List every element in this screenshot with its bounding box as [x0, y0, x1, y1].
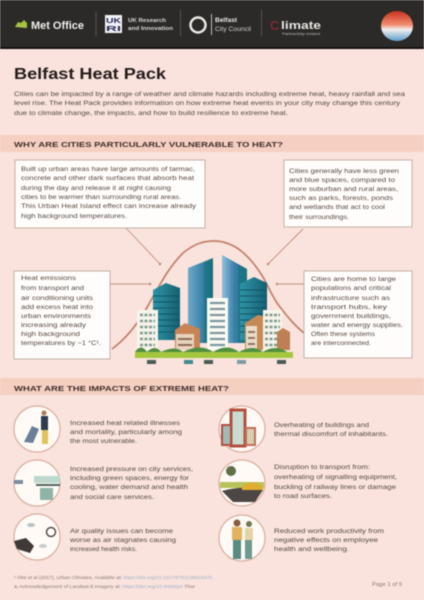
callout: urban heat island [15, 160, 205, 228]
impact: air quality: increased health risks. [70, 546, 137, 553]
logo: UK Research and Innovation: UK [106, 16, 122, 25]
callout: urban heat island: cities to be warmer than surrounding rural areas. [21, 194, 181, 201]
callout: urban heat island: during the day and release it at night causing [21, 185, 172, 192]
impact: air quality [14, 514, 177, 560]
logo: UK Research and Innovation: RI [106, 24, 121, 33]
centre right glass tower [222, 255, 247, 343]
footnotes: ¹ Oke et al (2017), Urban Climates, Available at: https://doi.org/10.1017/9781139016476 [14, 575, 212, 580]
callout: heat emissions: high background [21, 331, 81, 338]
impact: pressure on city services: including green spaces, energy for [70, 475, 190, 482]
callout: urban heat island: This Urban Heat Island effect can increase already [21, 203, 197, 210]
callout: heat emissions: air conditioning units [21, 295, 93, 302]
header band with partner logos [0, 0, 424, 49]
impact: work productivity: Reduced work productivity from [274, 528, 384, 535]
callout: urban heat island: Built up urban areas have large amounts of tarmac, [21, 166, 195, 173]
right white building [263, 310, 282, 350]
icon: tap and cooling unit [14, 460, 60, 506]
small vehicles [147, 360, 286, 364]
impact: air quality: Air quality issues can become [70, 528, 174, 535]
impact: work productivity [219, 515, 384, 561]
logo: heat pack round badge [381, 11, 413, 41]
callout: green and blue spaces: and blue spaces, compared to [289, 177, 396, 184]
callout: green and blue spaces: and wetlands that act to cool [289, 204, 385, 211]
callout: infrastructure [304, 271, 412, 358]
footnotes [14, 575, 212, 589]
city illustration [135, 255, 293, 364]
impact: transport disruption: to road surfaces. [274, 493, 332, 500]
logo: UK Research and Innovation: UK Research [128, 18, 166, 24]
impact: air quality: worse as air stagnates causing [69, 537, 177, 544]
callout: infrastructure: populations and critical [311, 285, 391, 292]
impact: illness and mortality: Increased heat related illnesses [70, 420, 180, 427]
callout: heat emissions: Heat emissions [21, 275, 76, 282]
logo: UK Research and Innovation [105, 15, 173, 33]
impact: transport disruption [219, 460, 397, 506]
arrow: green and blue spaces to city [267, 229, 303, 265]
callout: green and blue spaces: more suburban and rural areas, [289, 186, 398, 193]
icon: car on hot road [219, 460, 265, 506]
intro text: due to climate change, the impacts, and how to build resilience to extreme heat. [14, 110, 288, 117]
impact: illness and mortality: and mortality, particularly among [70, 429, 183, 436]
impact: work productivity: negative effects on employee [274, 537, 379, 544]
callout: infrastructure: water and energy supplies. [310, 322, 403, 329]
centre left glass tower [188, 258, 213, 343]
logo: Climate: Partnership Ireland [282, 32, 320, 36]
impact: transport disruption: buckling of railway lines or damage [274, 484, 397, 491]
logo: Climate [270, 18, 321, 36]
logo: Climate: limate [281, 20, 321, 32]
icon: person assisting wheelchair user [14, 406, 60, 452]
impact: illness and mortality: the most vulnerable. [70, 438, 137, 445]
callout: heat emissions: from transport and [21, 285, 85, 292]
arrow: infrastructure to city [276, 283, 305, 285]
logo: Belfast City Council: Belfast [215, 18, 237, 24]
arrow: urban heat island to city [126, 228, 161, 265]
icon: pollution and smoke [14, 514, 60, 560]
logo: Belfast City Council [190, 14, 251, 35]
callout: green and blue spaces: their surroundings. [289, 214, 349, 221]
left white building [137, 310, 158, 350]
logo: UK Research and Innovation: and Innovation [128, 26, 173, 32]
callout: infrastructure: Often these systems [311, 331, 375, 338]
callout: urban heat island: concrete and other dark surfaces that absorb heat [21, 175, 194, 182]
icon: hot buildings [219, 406, 265, 452]
left brick houses [175, 323, 200, 350]
impact: illness and mortality [14, 406, 183, 452]
impact: transport disruption: Disruption to transport from: [274, 464, 370, 471]
callout: infrastructure: government buildings, [311, 313, 391, 320]
icon: two workers [219, 515, 265, 561]
impact: pressure on city services: cooling, water demand and health [70, 484, 189, 491]
footnotes: & Acknowledgement of Landsat-8 imagery at: https://doi.org/10.5066/p9 Thor [14, 584, 196, 589]
impact: overheating of buildings: thermal discomfort of inhabitants. [274, 431, 388, 438]
title: Belfast Heat Pack [14, 66, 166, 83]
logo: Met Office: Met Office [31, 20, 84, 32]
centre white building [207, 298, 228, 350]
callout: heat emissions: temperatures by ~1 °C¹. [21, 339, 101, 347]
callout: heat emissions [14, 271, 110, 359]
callout: infrastructure: transport hubs, key [311, 304, 388, 311]
intro text [14, 91, 406, 117]
impact: transport disruption: overheating of signalling equipment, [274, 474, 397, 481]
left teal tower [153, 283, 180, 340]
callout: green and blue spaces: Cities generally have less green [289, 168, 400, 175]
callout: heat emissions: urban environments [21, 313, 91, 320]
intro text: level rise. The Heat Pack provides information on how extreme heat events in your city may change this century [14, 100, 401, 107]
section heading: impacts of extreme heat [0, 378, 424, 395]
arrow: heat emissions to city [110, 283, 151, 285]
logo: Belfast City Council: City Council [215, 27, 251, 33]
impact: overheating of buildings [219, 406, 388, 452]
impact: pressure on city services: Increased pressure on city services, [70, 466, 193, 473]
logo: Climate: C [270, 18, 280, 33]
right brick houses [245, 315, 290, 350]
callout: urban heat island: high background temperatures. [21, 213, 127, 220]
section heading: impacts of extreme heat: WHAT ARE THE IMPACTS OF EXTREME HEAT? [14, 384, 230, 393]
callout: infrastructure: are interconnected. [311, 340, 371, 347]
callout: heat emissions: add excess heat into [21, 304, 94, 311]
section heading: why cities are vulnerable: WHY ARE CITIES PARTICULARLY VULNERABLE TO HEAT? [14, 140, 284, 149]
callout: heat emissions: increasing already [21, 322, 87, 329]
right teal tower [240, 277, 267, 340]
greenery and ground [135, 348, 293, 358]
heat dome curve [112, 241, 304, 349]
callout: infrastructure: Cities are home to large [311, 276, 397, 283]
callout: green and blue spaces [284, 160, 412, 227]
intro text: Cities can be impacted by a range of weather and climate hazards including extreme heat, heavy rainfall and sea [14, 91, 406, 98]
impact: work productivity: health and wellbeing. [274, 546, 349, 553]
impact: overheating of buildings: Overheating of buildings and [274, 422, 370, 429]
impact: pressure on city services: and social care services. [70, 494, 154, 501]
callout: green and blue spaces: such as parks, forests, ponds [289, 195, 393, 202]
page number: Page 1 of 9 [372, 582, 402, 588]
impact: pressure on city services [14, 460, 193, 506]
callout: infrastructure: infrastructure such as [311, 295, 390, 302]
section heading: why cities are vulnerable [0, 135, 424, 152]
